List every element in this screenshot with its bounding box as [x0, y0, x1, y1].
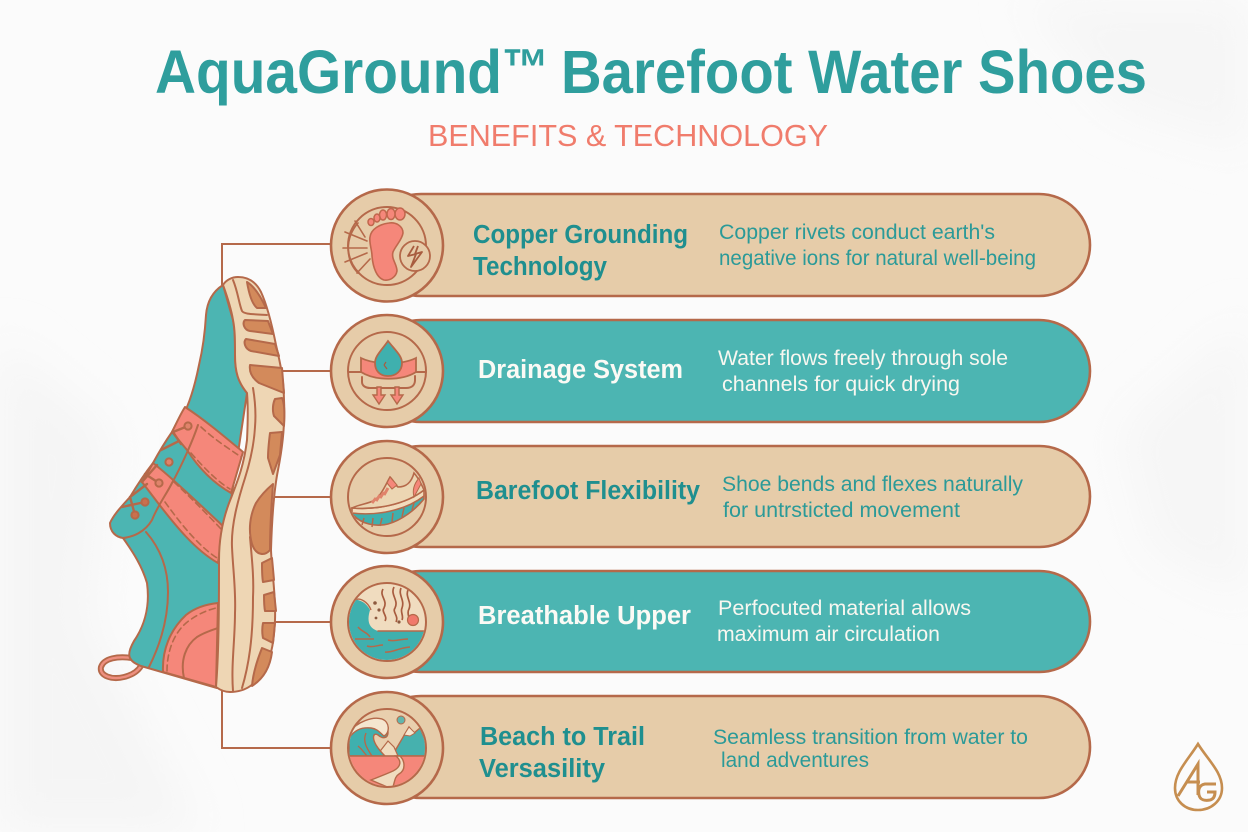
description — [719, 221, 1036, 270]
laces — [122, 422, 192, 519]
pill — [370, 320, 1090, 422]
benefit 5: beach to trail versatility — [331, 692, 1090, 804]
heading: Copper Grounding — [473, 221, 688, 249]
heel patch — [163, 603, 218, 687]
description: channels for quick drying — [722, 373, 960, 396]
pill — [370, 696, 1090, 798]
icon: bending shoe — [331, 441, 443, 553]
pull loop — [101, 657, 141, 678]
icon: breathable wave — [331, 566, 443, 678]
description — [713, 726, 1028, 772]
description — [722, 473, 1023, 522]
logo: AG water drop — [1175, 744, 1222, 810]
shoe upper — [110, 285, 247, 688]
heading: Technology — [473, 253, 608, 281]
connector lines — [222, 244, 332, 748]
pink stripe upper — [172, 407, 243, 493]
description: Water flows freely through sole — [718, 347, 1008, 370]
description: Seamless transition from water to — [713, 726, 1028, 749]
description — [718, 347, 1008, 396]
subtitle: BENEFITS & TECHNOLOGY — [428, 118, 828, 153]
description: Perfocuted material allows — [718, 597, 971, 620]
pill — [370, 571, 1090, 672]
heading: Versasility — [479, 755, 606, 783]
icon: wave, mountain and trail — [331, 692, 443, 804]
heading: Beach to Trail — [480, 723, 645, 751]
benefit 1: copper grounding technology — [331, 190, 1090, 302]
benefit 3: barefoot flexibility — [331, 441, 1090, 553]
description — [717, 597, 971, 646]
description: Shoe bends and flexes naturally — [722, 473, 1023, 496]
title: AquaGround — [155, 38, 502, 106]
heading — [473, 221, 688, 281]
heading: Barefoot Flexibility — [476, 477, 701, 505]
description: Copper rivets conduct earth's — [719, 221, 995, 244]
pill — [370, 194, 1090, 296]
pill — [370, 446, 1090, 547]
icon: foot and lightning — [331, 190, 443, 302]
description: land adventures — [721, 749, 869, 772]
title: Barefoot Water Shoes — [561, 38, 1147, 106]
title — [155, 38, 1147, 106]
sole tread blocks — [244, 282, 284, 686]
sole — [216, 277, 284, 692]
sole contour lines — [233, 280, 267, 315]
benefit 4: breathable upper — [331, 566, 1090, 678]
description: for untrsticted movement — [723, 499, 960, 522]
heading: Breathable Upper — [478, 602, 691, 630]
benefit 2: drainage system — [331, 315, 1090, 427]
title: ™ — [502, 39, 549, 97]
heading: Drainage System — [478, 356, 683, 384]
pink stripe lower — [142, 463, 223, 563]
heading — [479, 723, 645, 783]
shoe illustration — [101, 277, 284, 692]
description: negative ions for natural well-being — [719, 247, 1036, 270]
description: maximum air circulation — [717, 623, 940, 646]
icon: water drop and drainage — [331, 315, 443, 427]
upper seam and toe cap — [123, 425, 198, 538]
